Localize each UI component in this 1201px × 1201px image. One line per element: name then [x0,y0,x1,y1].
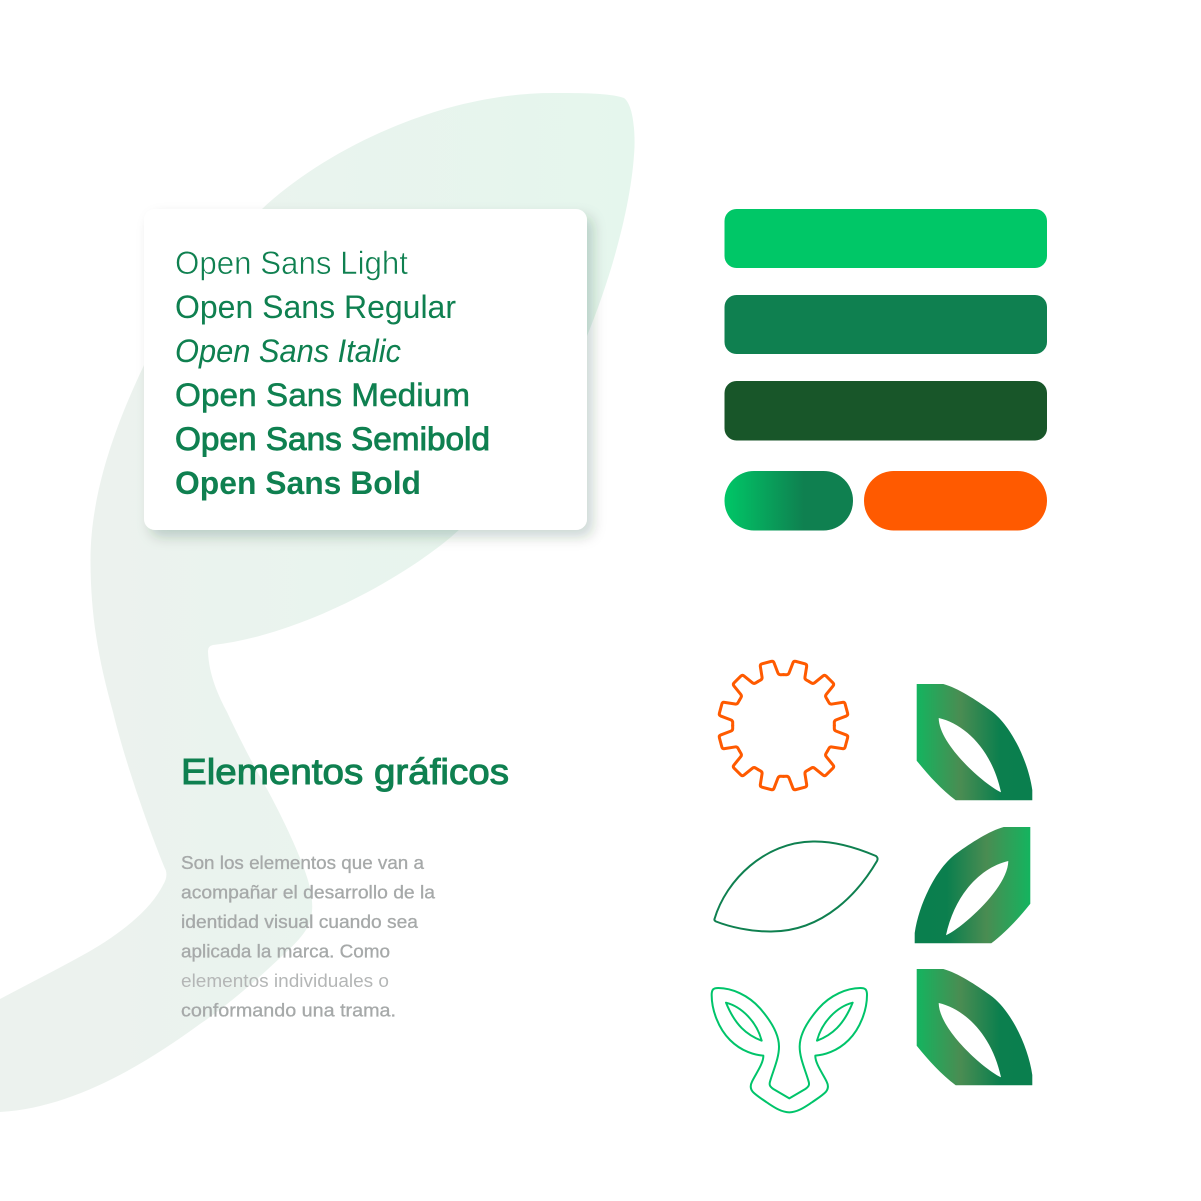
icon: orange gear outline [717,659,850,792]
text block: description: acompañar el desarrollo de la [181,882,436,902]
font sample: semibold: Open Sans Semibold [175,421,490,457]
swatch: bright green [724,209,1047,268]
font sample: medium: Open Sans Medium [175,377,470,413]
text block: description: elementos individuales o [181,971,389,991]
heading: elementos gráficos: Elementos gráficos [181,751,509,792]
deer left ear opening [726,1003,762,1041]
deer head contour [712,988,867,1112]
text block: description: conformando una trama. [181,1000,396,1020]
panel: typography card [144,209,587,530]
background leaf shape [0,93,635,1112]
deer right ear opening [817,1003,853,1041]
icon: deer head outline [712,988,867,1112]
font sample: bold: Open Sans Bold [175,465,421,501]
icon: gradient leaf top [917,684,1032,800]
card background [144,209,587,530]
swatch: medium green [724,295,1047,354]
panel: colour palette [724,209,1047,530]
font sample: italic: Open Sans Italic [175,333,401,369]
icon: gradient leaf bottom [917,969,1032,1085]
icon: outlined leaf [714,841,878,932]
swatch: gradient pill [724,471,853,530]
swatch: orange pill [864,471,1047,530]
font sample: light: Open Sans Light [175,245,408,281]
text block: description [181,853,436,1020]
text block: description: identidad visual cuando sea [181,912,419,932]
text block: description: aplicada la marca. Como [181,942,390,962]
font sample: regular: Open Sans Regular [175,289,456,325]
text block: description: Son los elementos que van a [181,853,425,873]
swatch: dark green [724,381,1047,440]
icon: gradient leaf middle [915,827,1030,943]
